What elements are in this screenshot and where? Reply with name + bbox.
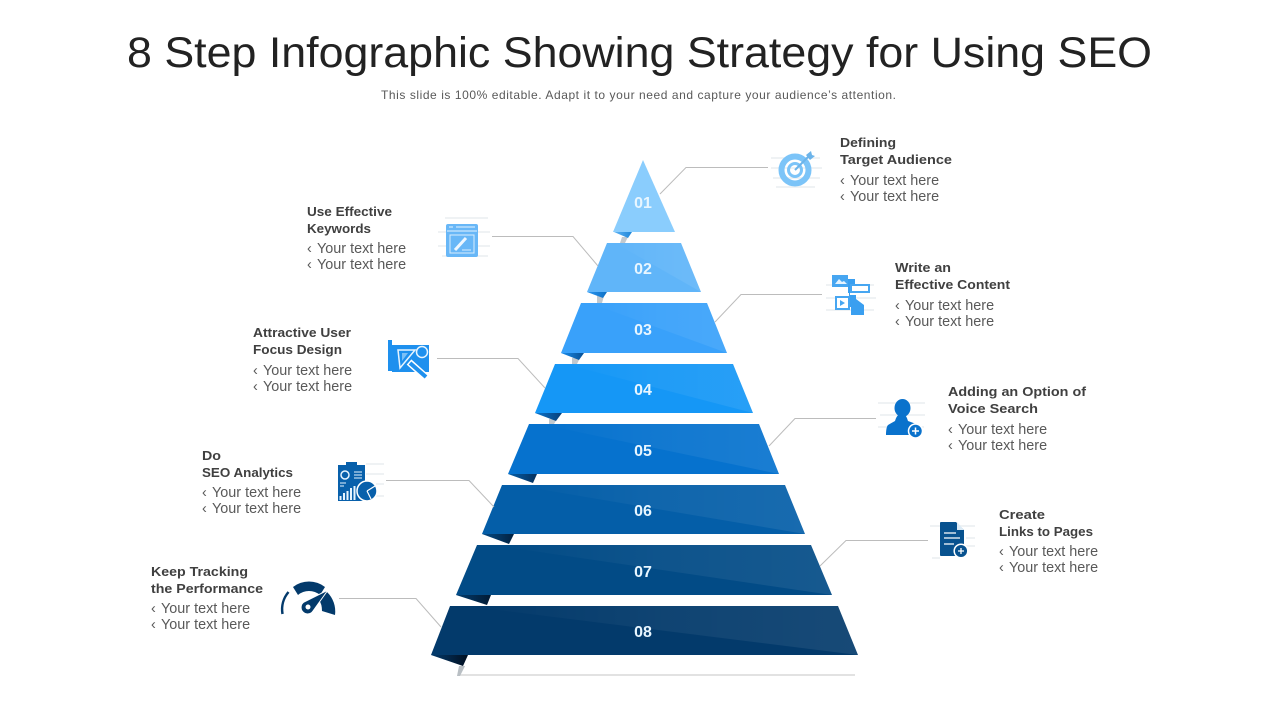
text: do seo analytics: ‹ [202,501,207,517]
step 05: 05 [634,443,652,460]
connector 03 [715,294,822,322]
icon: document add [930,522,975,558]
text: create links to pages: Your text here [1009,560,1098,576]
text: do seo analytics: Your text here [212,501,301,517]
step 06 [482,485,805,544]
step 04 [535,364,753,424]
step 08 [431,606,858,676]
text: defining target audience: Your text here [850,173,939,189]
connector 08 [339,598,441,627]
text: do seo analytics [202,448,301,517]
text: write an effective content [895,260,1011,330]
connector 07 [820,540,928,566]
step 06: 06 [634,503,652,520]
text: write an effective content: Your text here [905,298,994,314]
text: create links to pages [999,507,1098,576]
text: keep tracking the performance: ‹ [151,601,156,617]
bottom shadow line [460,674,855,676]
connector 06 [386,480,494,507]
text: write an effective content: Your text here [905,314,994,330]
text: create links to pages: ‹ [999,544,1004,560]
text: create links to pages: Create [999,507,1045,522]
text: write an effective content: ‹ [895,298,900,314]
subtitle: This slide is 100% editable. Adapt it to your need and capture your audience’s attention. [381,88,896,102]
step 01 [613,160,675,243]
text: defining target audience [840,135,952,205]
text: use effective keywords: Your text here [317,257,406,273]
text: create links to pages: ‹ [999,560,1004,576]
step 08: 08 [634,624,652,641]
text: adding an option of voice search: Adding an Option of [948,384,1087,399]
connector 02 [492,236,598,266]
text: use effective keywords [307,204,406,273]
step 01: 01 [634,195,652,212]
text: keep tracking the performance: the Performance [151,581,263,596]
text: keep tracking the performance: ‹ [151,617,156,633]
text: adding an option of voice search: Your text here [958,438,1047,454]
text: keep tracking the performance: Your text here [161,601,250,617]
icon: analytics report [338,462,384,501]
text: attractive user focus design: Your text here [263,379,352,395]
text: use effective keywords: Your text here [317,241,406,257]
text: adding an option of voice search: Voice Search [948,401,1038,416]
icon: design tools [388,340,429,379]
text: attractive user focus design: Your text here [263,363,352,379]
text: defining target audience: Your text here [850,189,939,205]
connector 04 [437,358,545,388]
text: attractive user focus design: ‹ [253,379,258,395]
text: do seo analytics: Your text here [212,485,301,501]
step 03: 03 [634,322,652,339]
text: adding an option of voice search: ‹ [948,422,953,438]
text: use effective keywords: ‹ [307,241,312,257]
step 02 [587,243,701,303]
step 03 [561,303,727,364]
text: defining target audience: ‹ [840,189,845,205]
icon: content media [826,275,876,315]
step 04: 04 [634,382,652,399]
text: keep tracking the performance: Keep Tracking [151,564,248,579]
step 07 [456,545,832,605]
text: attractive user focus design: Focus Design [253,342,342,357]
connector 05 [769,418,876,446]
text: defining target audience: ‹ [840,173,845,189]
text: use effective keywords: Use Effective [307,204,392,219]
text: attractive user focus design [253,325,352,395]
text: attractive user focus design: Attractive User [253,325,351,340]
text: keep tracking the performance: Your text here [161,617,250,633]
text: use effective keywords: ‹ [307,257,312,273]
text: write an effective content: Write an [895,260,951,275]
text: keep tracking the performance [151,564,263,633]
text: write an effective content: ‹ [895,314,900,330]
icon: browser pencil [438,218,490,257]
text: do seo analytics: SEO Analytics [202,465,293,480]
pyramid [431,160,858,676]
text: adding an option of voice search [948,384,1087,454]
text: defining target audience: Defining [840,135,896,150]
text: write an effective content: Effective Content [895,277,1011,292]
icon: user add [878,399,925,438]
text: defining target audience: Target Audience [840,152,952,167]
step 02: 02 [634,261,652,278]
text: adding an option of voice search: Your text here [958,422,1047,438]
icon: target [771,151,822,187]
text: adding an option of voice search: ‹ [948,438,953,454]
text: attractive user focus design: ‹ [253,363,258,379]
icon: speedometer [282,581,335,615]
connector 01 [660,168,768,194]
step 05 [508,424,779,483]
text: create links to pages: Your text here [1009,544,1098,560]
title: 8 Step Infographic Showing Strategy for Using SEO [127,29,1152,77]
text: do seo analytics: Do [202,448,221,463]
text: do seo analytics: ‹ [202,485,207,501]
step 07: 07 [634,564,652,581]
text: create links to pages: Links to Pages [999,524,1093,539]
text: use effective keywords: Keywords [307,221,371,236]
